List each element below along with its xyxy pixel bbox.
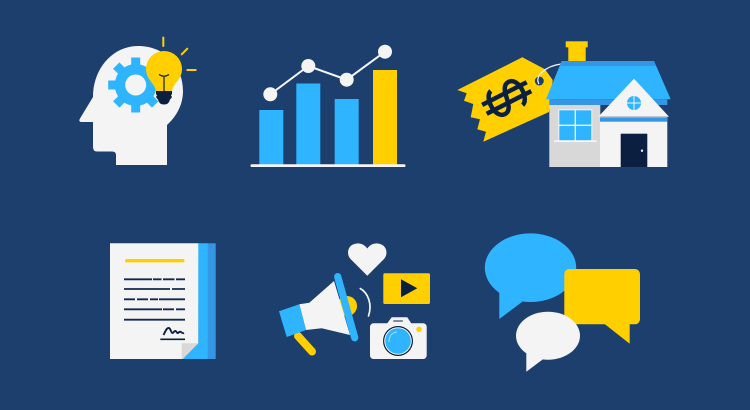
bars: [259, 70, 397, 164]
bulb rays: [163, 38, 196, 70]
gear: [108, 58, 163, 112]
light bulb: [146, 51, 182, 104]
icon: signed document: [110, 243, 216, 359]
price tag: [457, 57, 561, 142]
megaphone handle: [298, 336, 312, 352]
dollar sign: [478, 75, 535, 121]
signature: [160, 328, 185, 339]
icon: video player: [383, 273, 430, 304]
icon: head with gear and light bulb: [79, 38, 196, 165]
icon: camera: [370, 317, 427, 359]
megaphone rim: [338, 277, 355, 338]
megaphone cone: [299, 281, 350, 335]
megaphone speaker dome: [337, 296, 357, 316]
page fold: [182, 343, 198, 359]
gable: [598, 79, 669, 122]
chimney: [566, 41, 588, 62]
icon: speech bubbles: [485, 233, 640, 372]
document cover: [183, 243, 216, 359]
blue speech bubble: [485, 233, 576, 319]
yellow speech bubble: [564, 269, 640, 344]
window: [554, 109, 597, 142]
baseline: [250, 164, 406, 167]
roof: [546, 61, 671, 99]
heading line: [125, 259, 184, 262]
house walls: [549, 99, 667, 167]
sound wave: [360, 288, 370, 316]
icon: bar and line chart: [250, 45, 406, 167]
icon: heart: [348, 243, 386, 276]
trend line with points: [263, 45, 392, 101]
document page: [110, 243, 198, 359]
megaphone back: [279, 304, 306, 337]
head silhouette: [79, 46, 183, 165]
door: [621, 134, 647, 167]
white speech bubble: [516, 312, 580, 372]
icon: megaphone with media: [279, 243, 430, 359]
icon: house with price tag: [457, 41, 671, 167]
text lines: [124, 279, 185, 320]
